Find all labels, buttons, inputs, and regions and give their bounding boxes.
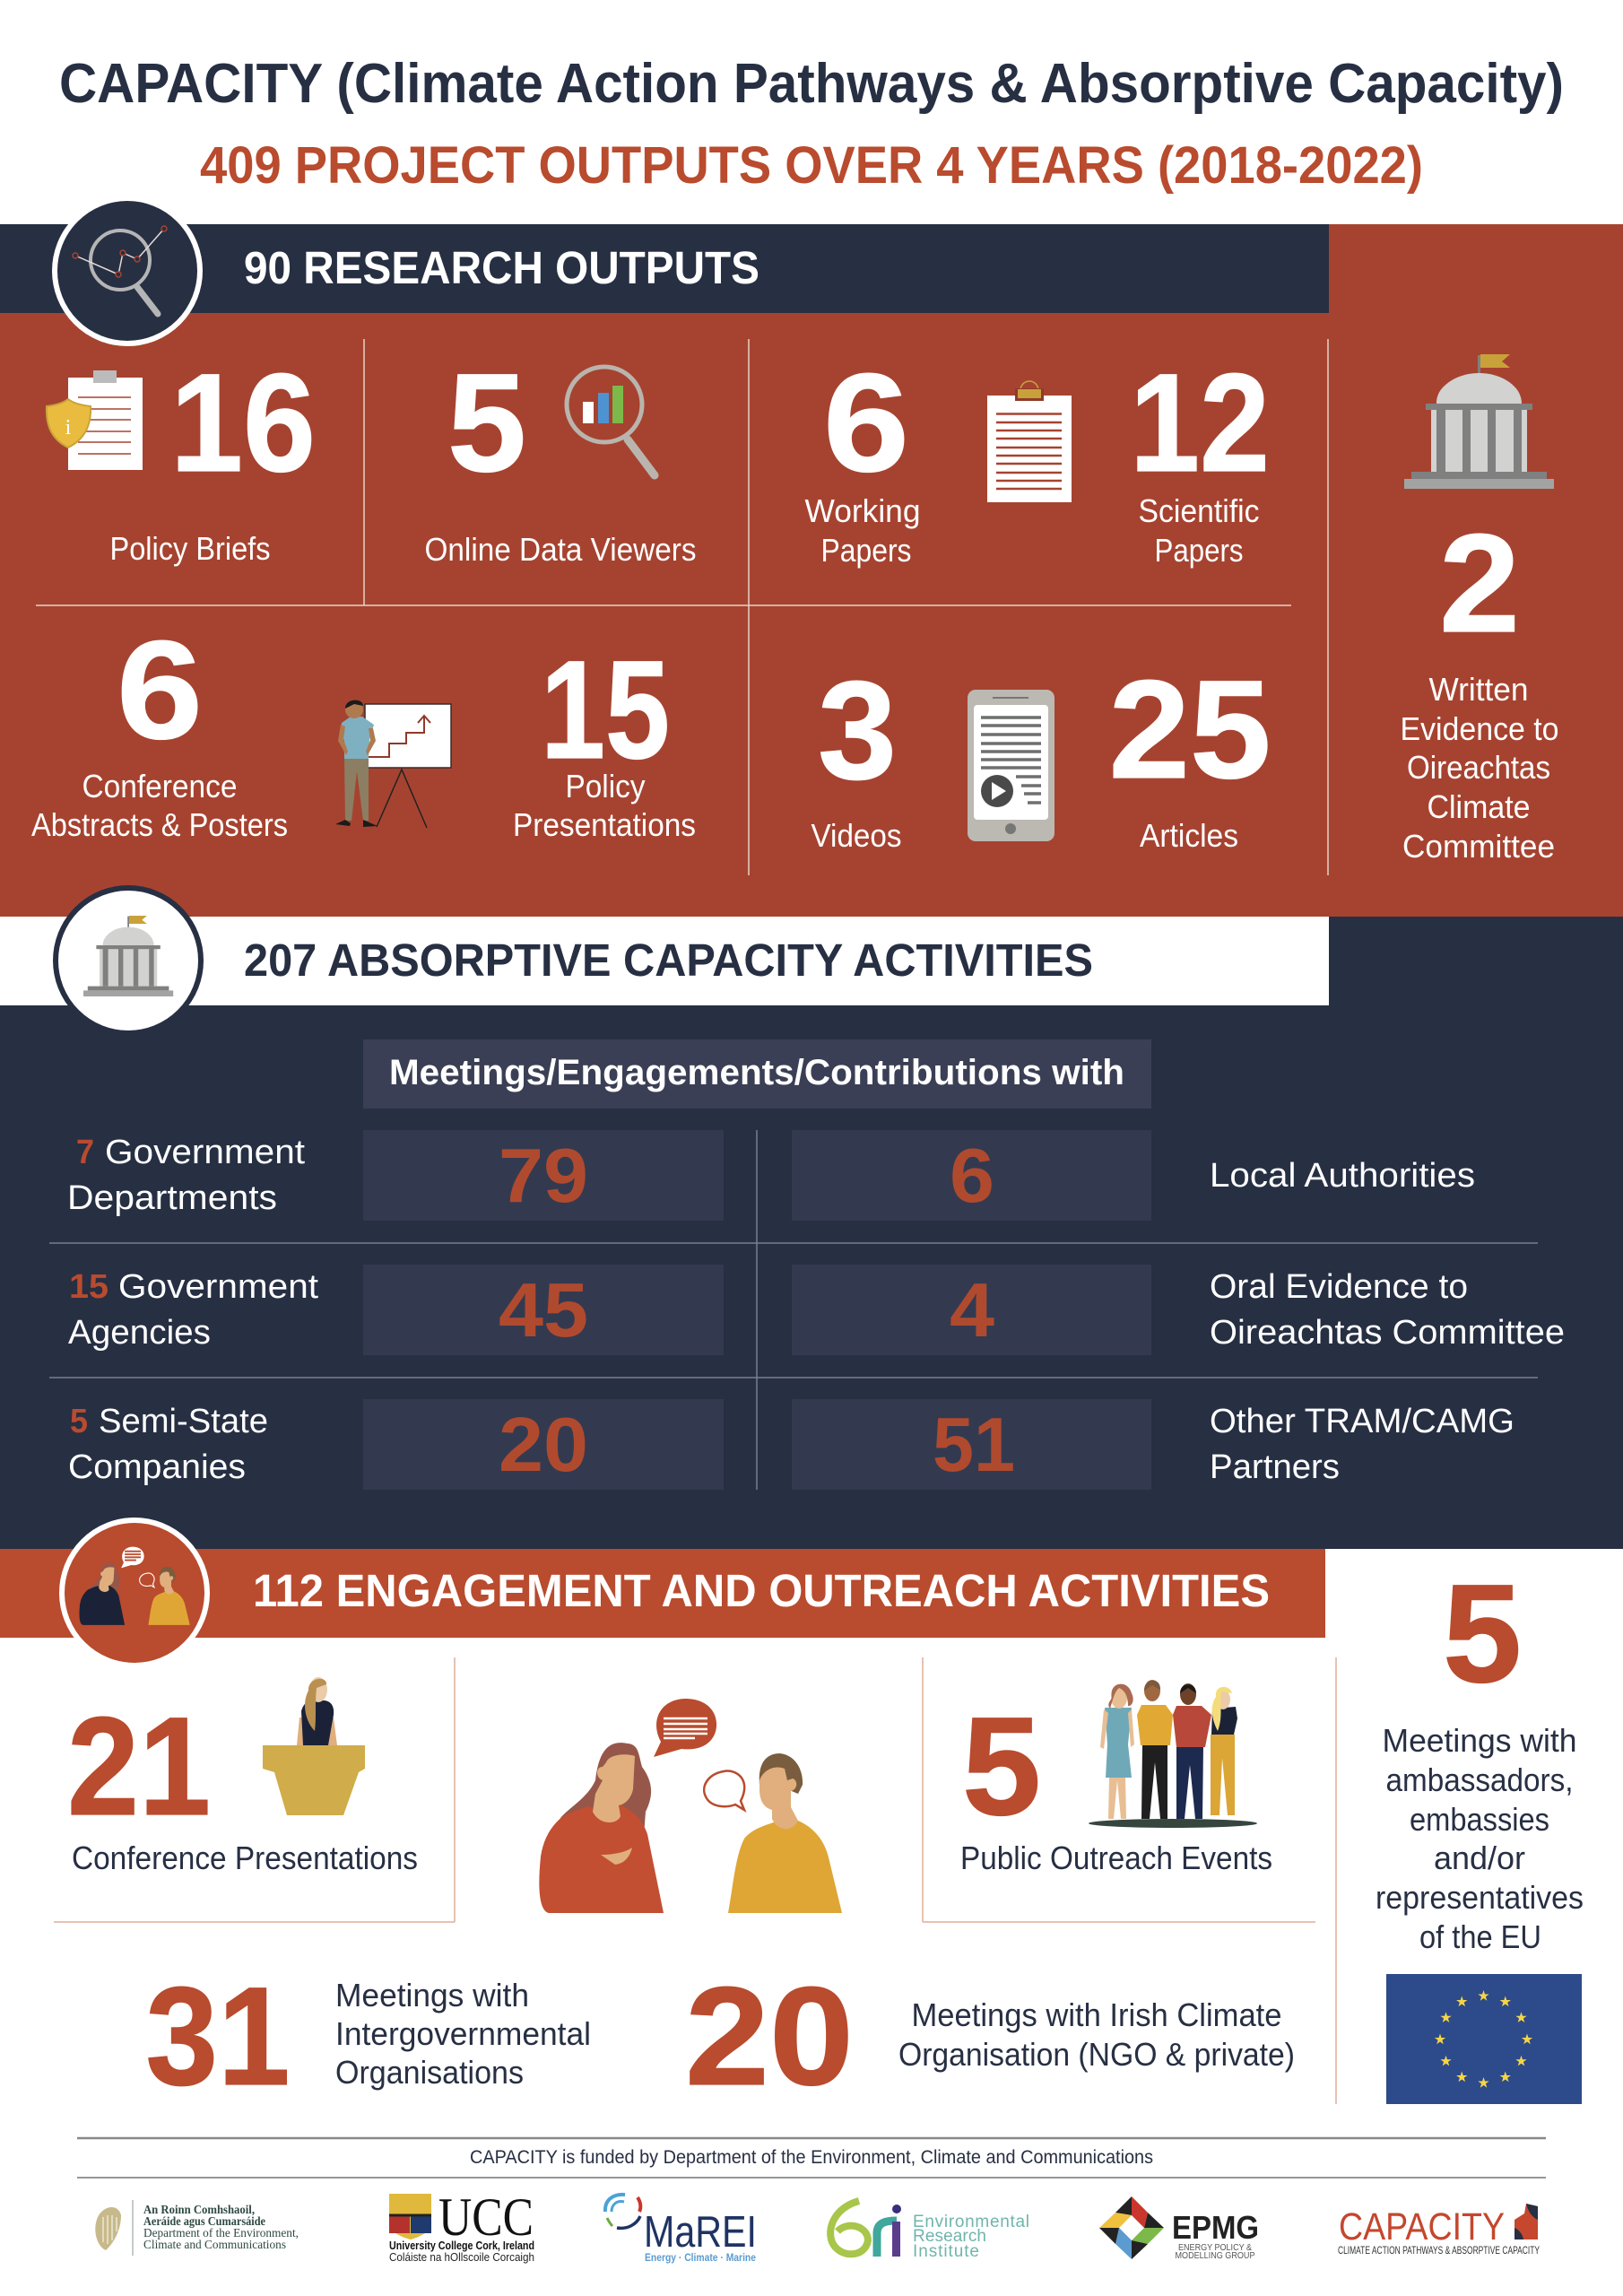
number: 5 [1443, 1556, 1522, 1712]
label [1210, 1403, 1515, 1486]
stat: 6 working papers [805, 345, 920, 569]
stat: 21 conference presentations [67, 1677, 418, 1876]
icon: clipboard document [987, 381, 1072, 502]
label: Online Data Viewers [425, 531, 696, 568]
logo: MaREI: MaREI [644, 2208, 757, 2257]
logo: Environmental Research Institute: Research [913, 2227, 986, 2246]
label: Partners [1210, 1448, 1340, 1486]
label: Oireachtas [1407, 749, 1550, 786]
value cell 45 [363, 1265, 724, 1355]
label: Organisation (NGO & private) [898, 2036, 1295, 2073]
logo: Environmental Research Institute: Environmental [913, 2213, 1029, 2231]
logo: MaREI: Energy · Climate · Marine [645, 2251, 756, 2264]
label: Evidence to [1401, 710, 1558, 747]
label: Policy Briefs [109, 530, 271, 567]
icon: two people talking in circle [62, 1520, 207, 1665]
stat: 5 meetings with ambassadors [1376, 1556, 1584, 2104]
icon: speaker at podium [263, 1677, 365, 1815]
label: Government [105, 1134, 305, 1171]
label: Local Authorities [1210, 1157, 1475, 1195]
label: Scientific [1139, 492, 1259, 529]
label: Videos [811, 817, 902, 854]
label: Climate [1428, 788, 1530, 825]
label: Meetings with Irish Climate [911, 1996, 1282, 2033]
label [1210, 1268, 1565, 1352]
banner: engagement [0, 1549, 1325, 1638]
heading: 207 absorptive capacity activities: 207 ABSORPTIVE CAPACITY ACTIVITIES [244, 935, 1093, 986]
label: Presentations [513, 806, 696, 843]
icon: magnifier with bar chart [567, 367, 655, 475]
panel: engagement and outreach [0, 1520, 1584, 2115]
label: embassies [1410, 1801, 1549, 1838]
value cell 4 [792, 1265, 1151, 1355]
number: 16 [170, 345, 316, 501]
label: Companies [68, 1448, 246, 1486]
icon: clipboard with shield [47, 370, 143, 470]
title: CAPACITY (Climate Action Pathways & Absorptive Capacity) [59, 53, 1564, 115]
row: government agencies [68, 1265, 1565, 1355]
stat: 12 scientific papers [1130, 345, 1270, 569]
stat: 15 policy presentations [513, 632, 696, 843]
label: Written [1429, 671, 1528, 708]
label: Policy [565, 768, 646, 804]
number: 2 [1439, 506, 1520, 662]
icon: clipboard with shield: i [65, 416, 72, 439]
label: Intergovernmental [335, 2015, 591, 2052]
value cell 4: 4 [950, 1268, 994, 1353]
table header: Meetings/Engagements/Contributions with [389, 1053, 1124, 1092]
logo: Department of the Environment [95, 2200, 299, 2256]
label [335, 1977, 591, 2091]
stat: 6 conference abstracts and posters [31, 613, 288, 843]
label [1376, 1722, 1584, 1955]
label: Abstracts & Posters [31, 806, 288, 843]
number: 6 [117, 613, 203, 769]
logo: CAPACITY: CLIMATE ACTION PATHWAYS & ABSORPTIVE CAPACITY [1338, 2244, 1540, 2257]
label: Agencies [68, 1314, 211, 1352]
label: Working [805, 492, 920, 529]
label: Other TRAM/CAMG [1210, 1403, 1515, 1440]
number: 15 [541, 632, 670, 788]
value cell 51: 51 [933, 1403, 1015, 1488]
label: Meetings with [1383, 1722, 1576, 1759]
heading: 90 research outputs: 90 RESEARCH OUTPUTS [244, 242, 759, 293]
number: 6 [823, 345, 909, 501]
logo: Environmental Research Institute: Institute [913, 2242, 979, 2261]
label: 15 [69, 1268, 108, 1306]
value cell 6: 6 [950, 1134, 994, 1219]
label: Conference [82, 768, 237, 804]
label: 5 [70, 1403, 88, 1440]
label [513, 768, 696, 843]
label: Committee [1402, 828, 1555, 865]
label [1139, 492, 1259, 569]
label: Papers [1155, 532, 1243, 569]
label: Oral Evidence to [1210, 1268, 1468, 1306]
icon: presenter with chart board [335, 700, 451, 828]
value cell 79: 79 [499, 1134, 588, 1219]
illustration: two people talking [539, 1699, 842, 1913]
speech bubble: outline [704, 1771, 744, 1810]
label: ambassadors, [1386, 1761, 1573, 1798]
label [68, 1403, 268, 1486]
panel: absorptive capacity activities [0, 888, 1623, 1549]
label [898, 1996, 1295, 2073]
label [805, 492, 920, 569]
icon: tablet with article and play button [968, 690, 1055, 841]
label: 7 [76, 1134, 94, 1171]
label: Organisations [335, 2054, 524, 2091]
heading: 112 engagement and outreach activities: 112 ENGAGEMENT AND OUTREACH ACTIVITIES [253, 1565, 1270, 1616]
stat: 5 public outreach events [960, 1680, 1272, 1876]
footer [77, 2138, 1546, 2264]
speech bubble: filled [654, 1699, 716, 1757]
stat: 25 articles [1108, 652, 1271, 854]
subtitle: 409 PROJECT OUTPUTS OVER 4 YEARS (2018-2022) [200, 136, 1423, 195]
table header [363, 1039, 1151, 1109]
stat: 31 intergovernmental meetings [145, 1959, 591, 2115]
banner: absorptive capacity [0, 917, 1329, 1005]
label: Government [118, 1268, 318, 1306]
logo: CAPACITY: CAPACITY [1339, 2205, 1505, 2248]
icon: parliament in circle [56, 888, 201, 1033]
value cell 20: 20 [499, 1403, 588, 1488]
logo: UCC: UCC [438, 2187, 534, 2247]
logo: EPMG: MODELLING GROUP [1175, 2250, 1255, 2261]
logo: EPMG: ENERGY POLICY & [1178, 2242, 1252, 2253]
label: Public Outreach Events [960, 1839, 1272, 1876]
icon: EU flag [1386, 1974, 1582, 2104]
label: Papers [821, 532, 911, 569]
label: Meetings with [335, 1977, 529, 2013]
stat: 5 online data viewers [425, 345, 696, 568]
funding note: CAPACITY is funded by Department of the Environment, Climate and Communications [470, 2147, 1153, 2168]
stat: 3 videos [811, 653, 902, 854]
logo: UCC: University College Cork, Ireland [389, 2239, 534, 2252]
value cell 79 [363, 1130, 724, 1221]
row: government departments [67, 1130, 1475, 1221]
label [67, 1134, 305, 1217]
number: 21 [67, 1689, 211, 1845]
logo: Environmental Research Institute [830, 2201, 1029, 2261]
logo: Department of the Environment: Department of the Environment, [143, 2227, 299, 2240]
stat: 20 irish climate organisation meetings [685, 1959, 1295, 2115]
panel: research outputs [0, 198, 1623, 917]
logo: Department of the Environment: An Roinn Comhshaoil, [143, 2204, 255, 2217]
value cell 51 [792, 1399, 1151, 1490]
icon: parliament building [1404, 354, 1554, 489]
label: Departments [67, 1179, 277, 1217]
logo: MaREI [605, 2195, 757, 2264]
logo: EPMG: EPMG [1172, 2209, 1259, 2246]
icon: group of four people [1089, 1680, 1257, 1828]
stat: 16 policy briefs [47, 345, 316, 567]
value cell 20 [363, 1399, 724, 1490]
value cell 6 [792, 1130, 1151, 1221]
label: Articles [1140, 817, 1238, 854]
logo: UCC [389, 2187, 534, 2264]
number: 25 [1108, 652, 1271, 808]
label: Conference Presentations [72, 1839, 418, 1876]
number: 5 [447, 345, 526, 501]
label: representatives [1376, 1879, 1584, 1916]
number: 20 [685, 1959, 854, 2115]
banner: research outputs [0, 224, 1329, 313]
number: 12 [1130, 345, 1270, 501]
icon: magnifier with line chart [55, 198, 200, 344]
number: 5 [962, 1689, 1041, 1845]
label: and/or [1434, 1839, 1525, 1876]
logo: Department of the Environment: Climate and Communications [143, 2239, 286, 2252]
label [1401, 671, 1558, 865]
label [31, 768, 288, 843]
logo: UCC: Coláiste na hOllscoile Corcaigh [389, 2250, 534, 2264]
value cell 45: 45 [499, 1268, 588, 1353]
logo: EPMG [1099, 2196, 1259, 2261]
number: 31 [145, 1959, 291, 2115]
row: semi-state companies [68, 1399, 1515, 1490]
label: Semi-State [99, 1403, 268, 1440]
logo: Department of the Environment: Aeráide agus Cumarsáide [143, 2215, 265, 2229]
label: of the EU [1419, 1918, 1541, 1955]
number: 3 [818, 653, 897, 809]
label: Oireachtas Committee [1210, 1314, 1565, 1352]
stat: 2 written evidence [1401, 354, 1558, 865]
label [68, 1268, 318, 1352]
